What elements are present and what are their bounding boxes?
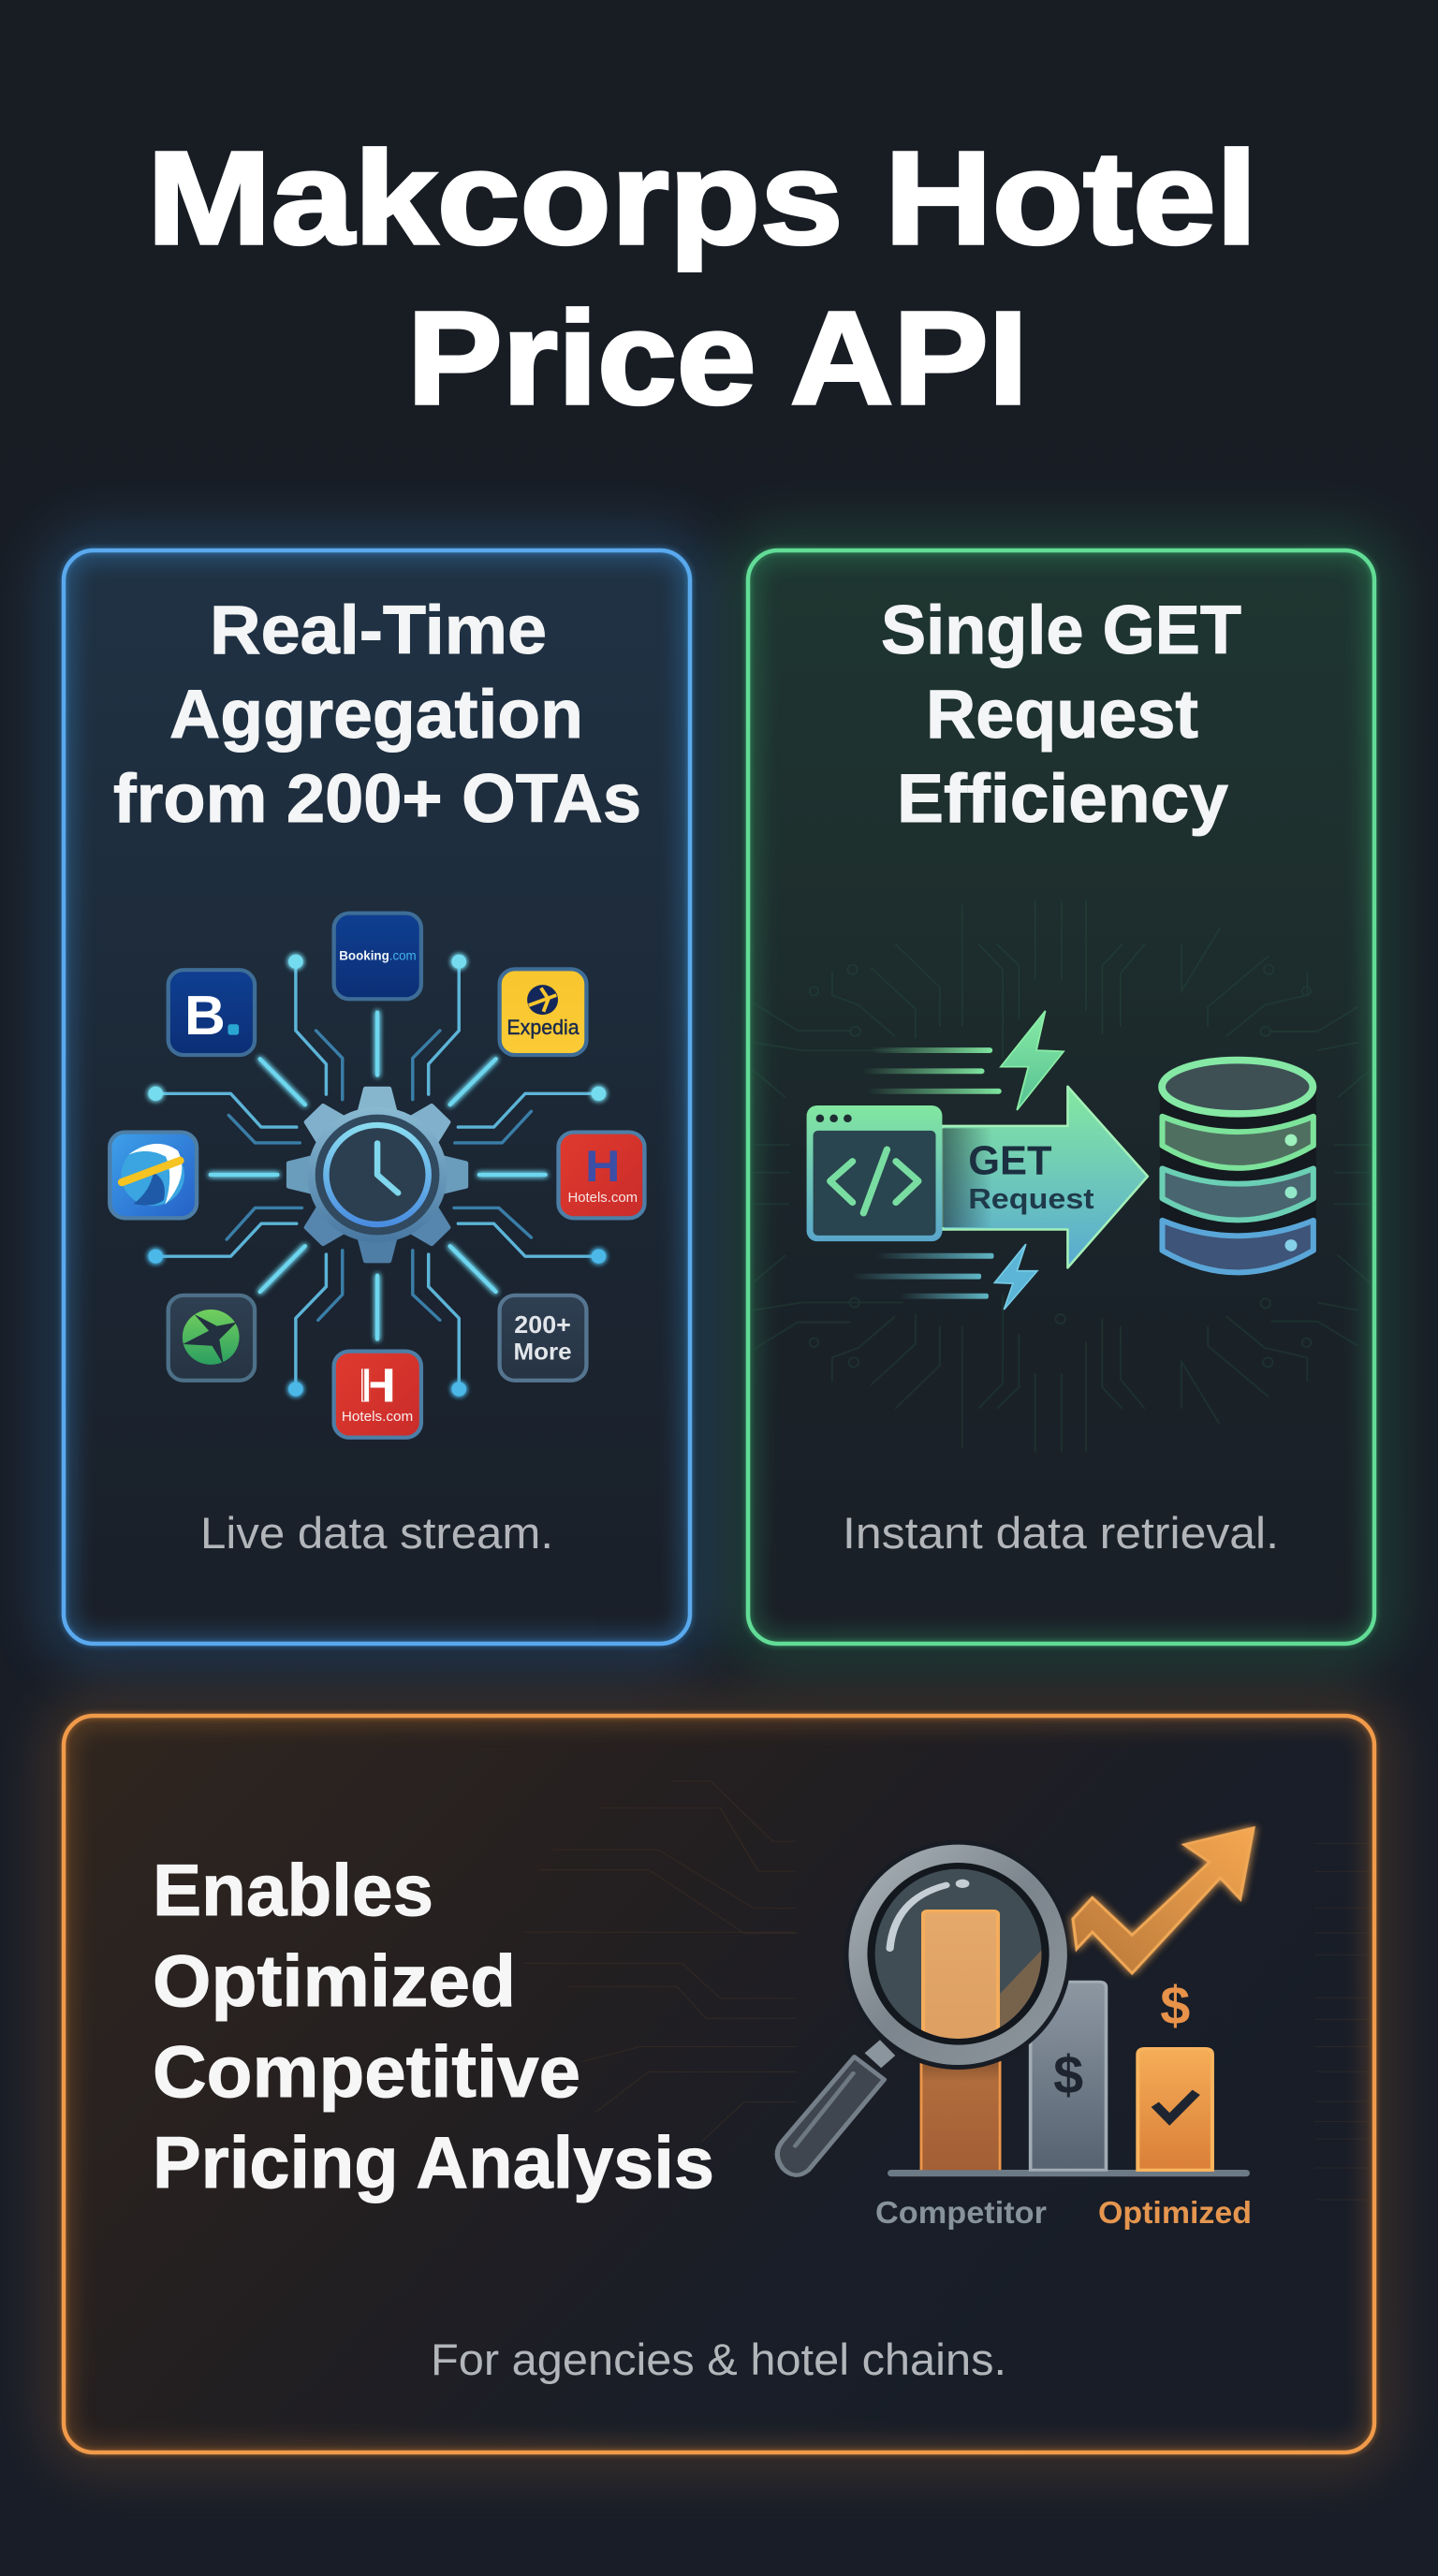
bar label: competitor: Competitor [875, 2195, 1047, 2230]
icon: gear clock [289, 1089, 466, 1261]
circuit traces [155, 961, 598, 1389]
icon: 200+ more: 200+ [514, 1310, 571, 1339]
radial glowing lines [211, 1013, 546, 1339]
icon: lightning top [1001, 1011, 1064, 1110]
caption: Instant data retrieval. [843, 1508, 1279, 1558]
icon: globe travel [110, 1133, 197, 1218]
trace end dots [148, 955, 606, 1397]
panel heading [153, 1849, 714, 2203]
arrow: GET request: GET [968, 1138, 1052, 1183]
circuit background [753, 900, 1371, 1452]
panel heading: Request [926, 677, 1198, 753]
title [147, 124, 1257, 432]
bar chart [888, 1976, 1250, 2176]
icon: Hotels.com bottom [334, 1352, 421, 1438]
panel: real-time aggregation [64, 550, 690, 1644]
panel: competitive pricing [64, 1716, 1374, 2452]
icon: Hotels.com bottom: H [358, 1359, 396, 1412]
icon: code window [807, 1105, 942, 1241]
icon: magnifying glass [777, 1840, 1072, 2175]
icon: Hotels.com right: H [585, 1142, 620, 1192]
panel heading: Aggregation [169, 677, 583, 753]
arrow: price trend up [1073, 1828, 1254, 1973]
icon: Expedia: Expedia [506, 1016, 580, 1039]
icon: Booking.com [334, 914, 421, 999]
bar chart: $ [1160, 1976, 1190, 2036]
title: Makcorps Hotel [147, 124, 1257, 271]
icon: green plane [169, 1295, 255, 1381]
icon: database [1160, 1061, 1316, 1273]
arrow: GET request [942, 1087, 1148, 1267]
icon: B. [169, 970, 255, 1055]
panel heading: Single GET [881, 593, 1241, 668]
chart: price comparison with magnifier [777, 1828, 1254, 2176]
icon: Booking.com: Booking.com [339, 949, 417, 963]
icon: Expedia [500, 969, 586, 1055]
diagram: GET request to database [753, 900, 1371, 1452]
panel heading: from 200+ OTAs [113, 761, 641, 837]
panel heading: Enables [153, 1849, 433, 1931]
caption: Live data stream. [200, 1508, 553, 1558]
panel heading: Optimized [153, 1939, 516, 2022]
panel heading: Efficiency [897, 761, 1228, 837]
title: Price API [407, 284, 1028, 432]
circuit background [524, 1781, 1372, 2200]
arrow: GET request: Request [968, 1183, 1094, 1215]
bar label: optimized: Optimized [1098, 2195, 1252, 2230]
panel heading [881, 593, 1241, 837]
panel heading: Competitive [153, 2030, 580, 2113]
speed lines [850, 1047, 1002, 1299]
diagram: OTA hub [110, 914, 644, 1438]
icon: Hotels.com right [558, 1133, 644, 1218]
icon: 200+ more [500, 1295, 586, 1381]
bar chart: $ [1053, 2045, 1083, 2105]
icon: B.: B [184, 985, 226, 1046]
panel heading: Real-Time [210, 593, 547, 668]
panel heading: Pricing Analysis [153, 2121, 714, 2203]
panel: single GET request [748, 550, 1374, 1644]
icon: lightning bottom [994, 1244, 1037, 1310]
icon: Hotels.com right: Hotels.com [567, 1191, 638, 1206]
panel heading [113, 593, 641, 837]
icon: 200+ more: More [514, 1339, 572, 1365]
caption: For agencies & hotel chains. [431, 2334, 1006, 2384]
icon: Hotels.com bottom: Hotels.com [342, 1410, 413, 1425]
